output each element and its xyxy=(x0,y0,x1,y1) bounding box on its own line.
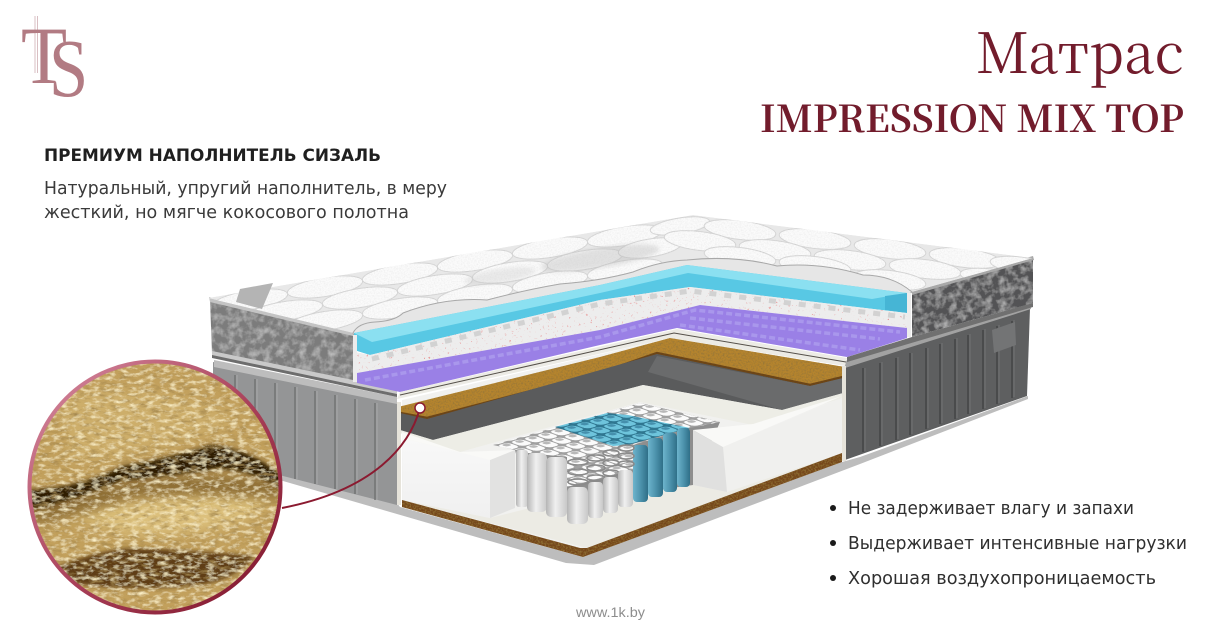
layer: sisal xyxy=(398,338,845,418)
cream support slab xyxy=(400,385,843,452)
layer backing xyxy=(402,338,845,550)
cut frame piping xyxy=(399,366,844,505)
mattress side caps xyxy=(355,293,909,382)
connector line from layer to lens xyxy=(282,408,420,508)
layer: grey foam xyxy=(400,354,843,440)
right mattress side xyxy=(912,256,1034,337)
watermark: www.1k.by xyxy=(575,605,645,620)
feature list xyxy=(830,499,1187,589)
left base panel xyxy=(212,353,397,505)
logo: TS monogram: S xyxy=(49,22,88,114)
heading: sisal filler: ПРЕМИУМ НАПОЛНИТЕЛЬ СИЗАЛЬ xyxy=(44,146,381,165)
layer: lavender profile foam xyxy=(357,305,907,392)
lens ring xyxy=(30,362,280,612)
bullet 2: Выдерживает интенсивные нагрузки xyxy=(848,534,1187,554)
text block: sisal description: жесткий, но мягче кокосового полотна xyxy=(44,203,409,223)
left foam block xyxy=(402,432,515,518)
text block: sisal description: Натуральный, упругий наполнитель, в меру xyxy=(44,179,447,199)
cream sheet below foam xyxy=(397,329,847,399)
magnified sisal lens xyxy=(25,358,285,618)
bottom coir layer xyxy=(402,453,842,557)
right foam block xyxy=(693,396,842,492)
floor slab xyxy=(402,453,842,548)
text block: sisal description xyxy=(44,179,447,223)
connector marker dot xyxy=(415,403,425,413)
right base label tag xyxy=(992,322,1016,353)
bullet 1: Не задерживает влагу и запахи xyxy=(848,499,1134,519)
logo: TS monogram xyxy=(21,11,88,114)
lens fiber texture xyxy=(25,358,285,618)
quilted top surface xyxy=(208,213,1051,336)
logo: TS monogram: T xyxy=(21,11,67,102)
left mattress label tag xyxy=(236,283,273,309)
title: product name: IMPRESSION MIX TOP xyxy=(760,89,1184,143)
bottom edge strip of base xyxy=(213,396,1028,565)
right base panel xyxy=(845,303,1033,460)
layer: memory foam (blue) xyxy=(354,265,907,355)
title: product type: Матрас xyxy=(976,10,1184,90)
spring well backing xyxy=(495,403,720,508)
latex egg-crate valleys xyxy=(372,291,905,359)
left mattress side xyxy=(209,297,397,394)
mattress cutaway illustration xyxy=(208,213,1051,565)
layer: latex with red specks xyxy=(355,287,907,374)
pocket spring columns xyxy=(516,428,690,524)
purple profile ridges xyxy=(365,310,900,380)
spring top grid: blue xyxy=(555,413,690,446)
layer: sisal edge xyxy=(400,353,843,418)
scalloped cover cut edge xyxy=(353,258,912,336)
spring top grid: white xyxy=(493,403,720,487)
bullet 3: Хорошая воздухопроницаемость xyxy=(848,569,1156,589)
